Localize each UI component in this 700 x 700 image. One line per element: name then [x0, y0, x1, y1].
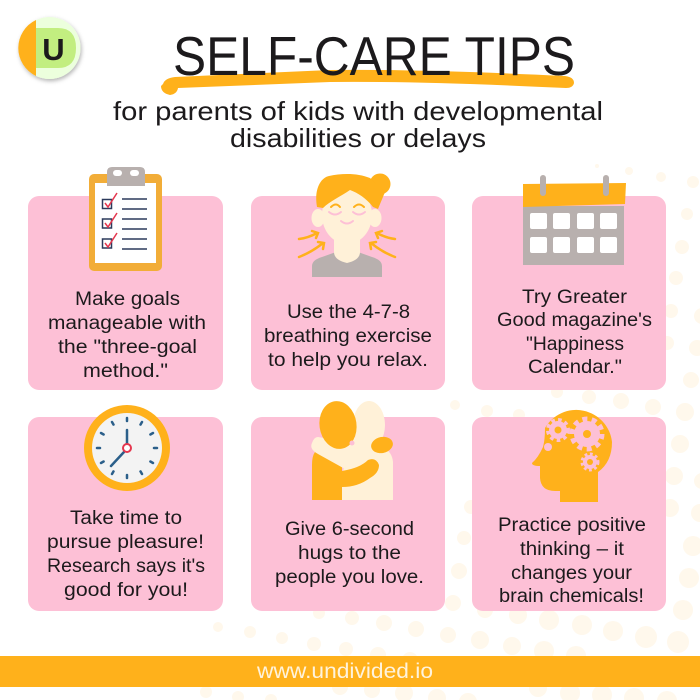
footer banner: www.undivided.io — [256, 660, 433, 683]
text: make goals manageable: the "three-goal — [58, 337, 197, 358]
panel: three-goal method — [28, 167, 223, 390]
text: six-second hugs — [275, 519, 424, 588]
icon: calendar — [523, 175, 626, 265]
panel: pursue pleasure — [28, 405, 223, 611]
text: make goals manageable — [48, 289, 206, 382]
text: six-second hugs: Give 6-second — [285, 519, 414, 540]
text: positive thinking: thinking – it — [520, 539, 625, 560]
text: happiness calendar: Try Greater — [522, 287, 628, 308]
text: make goals manageable: manageable with — [48, 313, 206, 334]
text: happiness calendar: Calendar." — [528, 357, 622, 378]
icon: relaxed face with breathing arrows — [299, 174, 395, 277]
text: breathing exercise — [264, 302, 432, 371]
text: six-second hugs: hugs to the — [298, 543, 401, 564]
text: pursue pleasure: Research says it's — [47, 556, 205, 577]
text: pursue pleasure — [47, 508, 205, 601]
text: happiness calendar — [497, 287, 652, 378]
icon: clipboard checklist — [89, 167, 162, 271]
panel: happiness calendar — [472, 175, 666, 390]
text: happiness calendar: "Happiness — [526, 334, 624, 355]
text: positive thinking: brain chemicals! — [499, 586, 644, 607]
panel: six-second hugs — [251, 399, 445, 611]
text: make goals manageable: method." — [83, 361, 168, 382]
text: breathing exercise: breathing exercise — [264, 326, 432, 347]
text: breathing exercise: to help you relax. — [268, 350, 428, 371]
text: positive thinking: changes your — [511, 563, 633, 584]
text: make goals manageable: Make goals — [75, 289, 180, 310]
text: pursue pleasure: Take time to — [70, 508, 182, 529]
subtitle: disabilities or delays — [230, 123, 486, 153]
panel: breathing exercise — [251, 174, 445, 390]
title: SELF-CARE TIPS — [173, 25, 575, 87]
subtitle: for parents of kids with developmental — [113, 96, 603, 126]
text: pursue pleasure: pursue pleasure! — [47, 532, 204, 553]
panel: positive thinking — [472, 410, 666, 611]
text: six-second hugs: people you love. — [275, 567, 424, 588]
logo: Undivided U badge: U — [42, 32, 65, 67]
subtitle — [113, 96, 603, 153]
footer banner — [0, 656, 700, 687]
logo: Undivided U badge — [18, 17, 81, 79]
icon: clock — [84, 405, 170, 491]
text: pursue pleasure: good for you! — [64, 580, 188, 601]
icon: two people hugging — [311, 399, 394, 500]
text: breathing exercise: Use the 4-7-8 — [287, 302, 410, 323]
text: positive thinking: Practice positive — [498, 515, 646, 536]
title underline brush stroke — [161, 70, 574, 95]
text: positive thinking — [498, 515, 646, 607]
text: happiness calendar: Good magazine's — [497, 310, 652, 331]
icon: head with gears — [532, 410, 612, 502]
